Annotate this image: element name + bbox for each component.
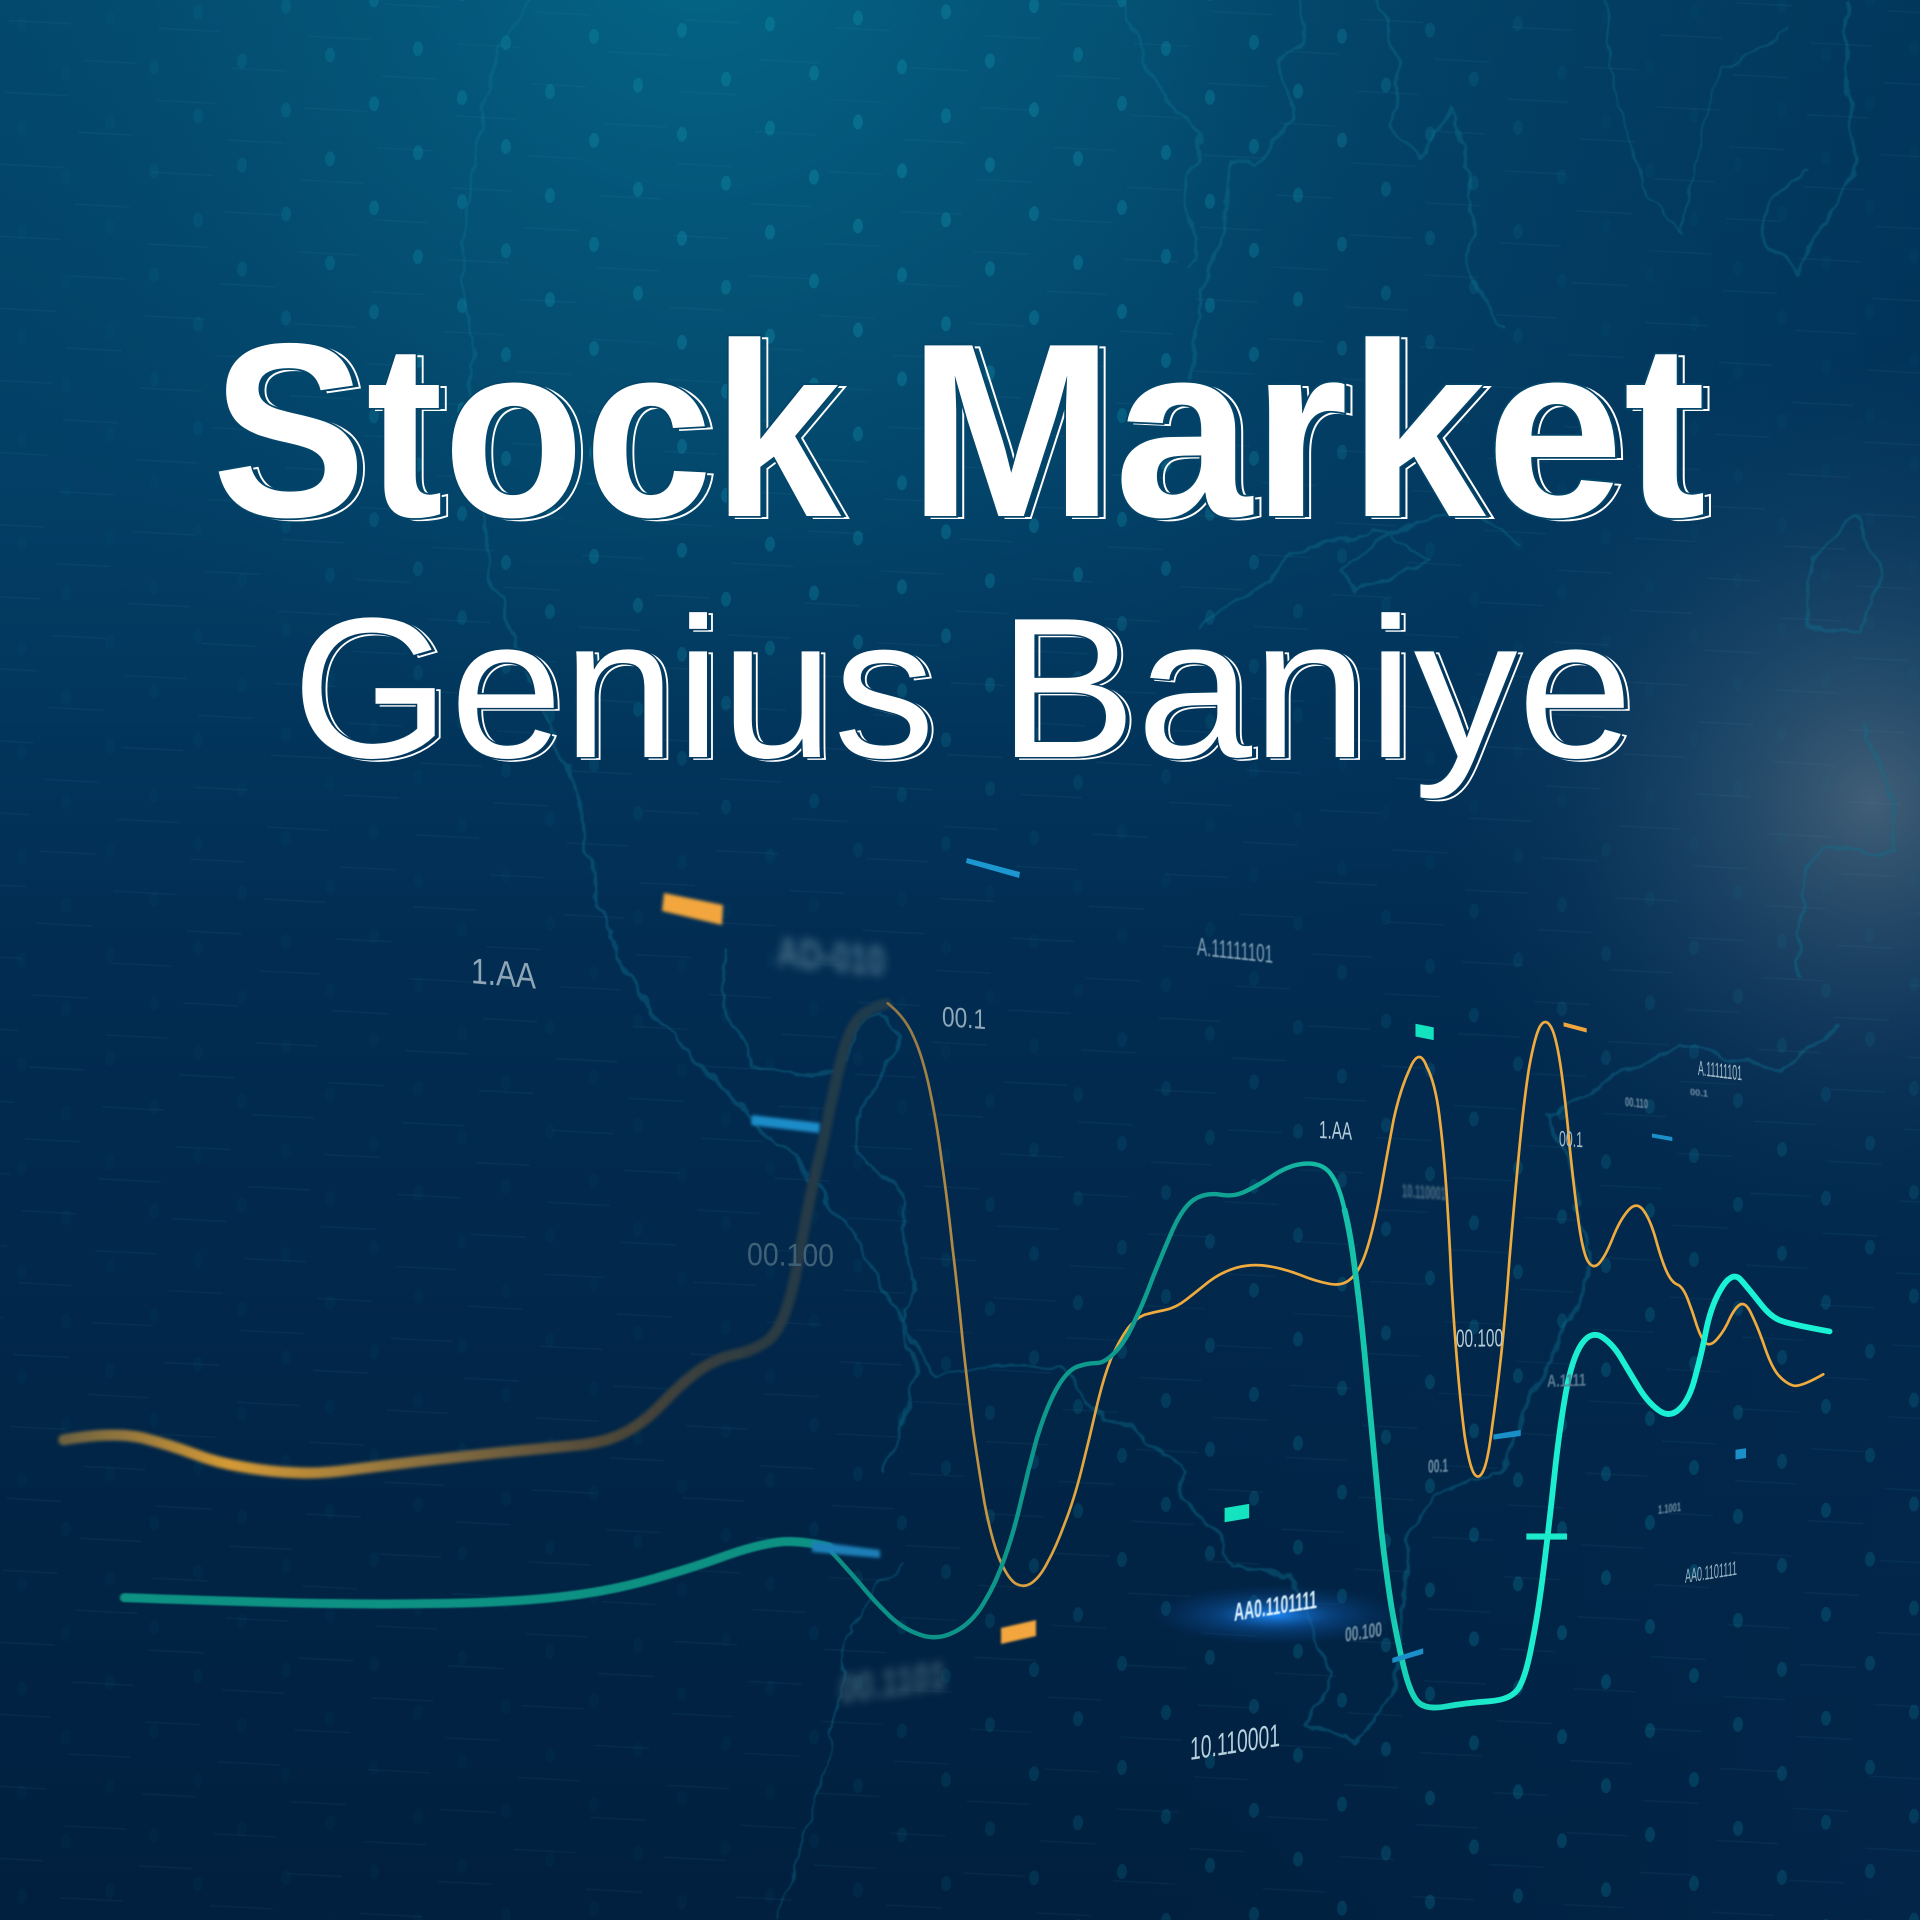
label glowing AA0.1101111: AA0.1101111 [1234, 1586, 1317, 1627]
title line 2: Genius Baniye: Baniye [1003, 579, 1638, 802]
marker: blue dash [1493, 1430, 1521, 1440]
marker: teal cross tick [1526, 1533, 1567, 1540]
title line 2: Genius Baniye [292, 577, 1638, 802]
blurred blue marker on teal line [812, 1541, 880, 1558]
label tiny lower: 1.1001 [1658, 1500, 1681, 1517]
label 00.100 chart: 00.100 [1456, 1324, 1503, 1353]
title line 2: Genius Baniye: Genius [297, 579, 940, 802]
blurred orange marker lower [1001, 1620, 1036, 1644]
text: AA0.1101111 [1685, 1558, 1737, 1588]
chart lines and markers [832, 1003, 1830, 1708]
blurred orange marker top [662, 893, 723, 925]
label 00.100 blurred lower: 00.100 [1345, 1618, 1382, 1647]
blurred teal trend line [124, 1542, 829, 1604]
title line 2: Genius Baniye: Genius [292, 577, 935, 800]
label A.11111101 top: A.11111101 [1197, 933, 1273, 969]
label glowing AA0.1101111 [1150, 1585, 1400, 1645]
label tiny blurred one: 00.110 [1625, 1094, 1648, 1111]
blurred orange trend line [64, 1004, 887, 1473]
title line 1: Stock Market: Stock [212, 291, 842, 569]
label AD-010 blurred: AD-010 [777, 928, 885, 984]
world map outlines [463, 0, 1893, 1920]
orange line [888, 1003, 1823, 1586]
blurred blue marker [751, 1115, 820, 1133]
title line 2: Genius Baniye: Baniye [998, 577, 1633, 800]
title line 1: Stock Market [212, 291, 1713, 571]
label 10.110001: 10.110001 [1190, 1717, 1280, 1767]
marker: teal block [1225, 1504, 1249, 1522]
label 00.1 lower: 00.1 [1428, 1456, 1448, 1477]
label 00.100 faint: 00.100 [747, 1236, 834, 1274]
label 1.AA left: 1.AA [471, 950, 536, 997]
label 00.1101 blurred: 00.1101 [840, 1652, 946, 1712]
title line 1: Stock Market: Market [915, 293, 1713, 571]
data labels [471, 928, 1742, 1767]
marker: blue lower dash [1392, 1648, 1423, 1663]
marker: blue square [1735, 1448, 1746, 1459]
label tiny blurred two: 00.1 [1690, 1087, 1708, 1099]
blue marker top [966, 858, 1020, 878]
label 00.1 right: 00.1 [1559, 1126, 1583, 1152]
label 10.110001 blurred: 10.110001 [1402, 1181, 1446, 1204]
teal line [832, 1164, 1830, 1708]
marker: blue right [1652, 1133, 1672, 1141]
label A.1111 blurred: A.1111 [1547, 1370, 1586, 1391]
label 00.1: 00.1 [942, 1001, 986, 1035]
marker: teal top [1415, 1024, 1434, 1040]
title line 1: Stock Market: Market [908, 291, 1706, 569]
text: A.11111101 [1698, 1057, 1742, 1085]
title line 1: Stock Market: Stock [219, 293, 849, 571]
marker: orange top [1564, 1022, 1587, 1032]
label 1.AA chart: 1.AA [1319, 1116, 1352, 1146]
